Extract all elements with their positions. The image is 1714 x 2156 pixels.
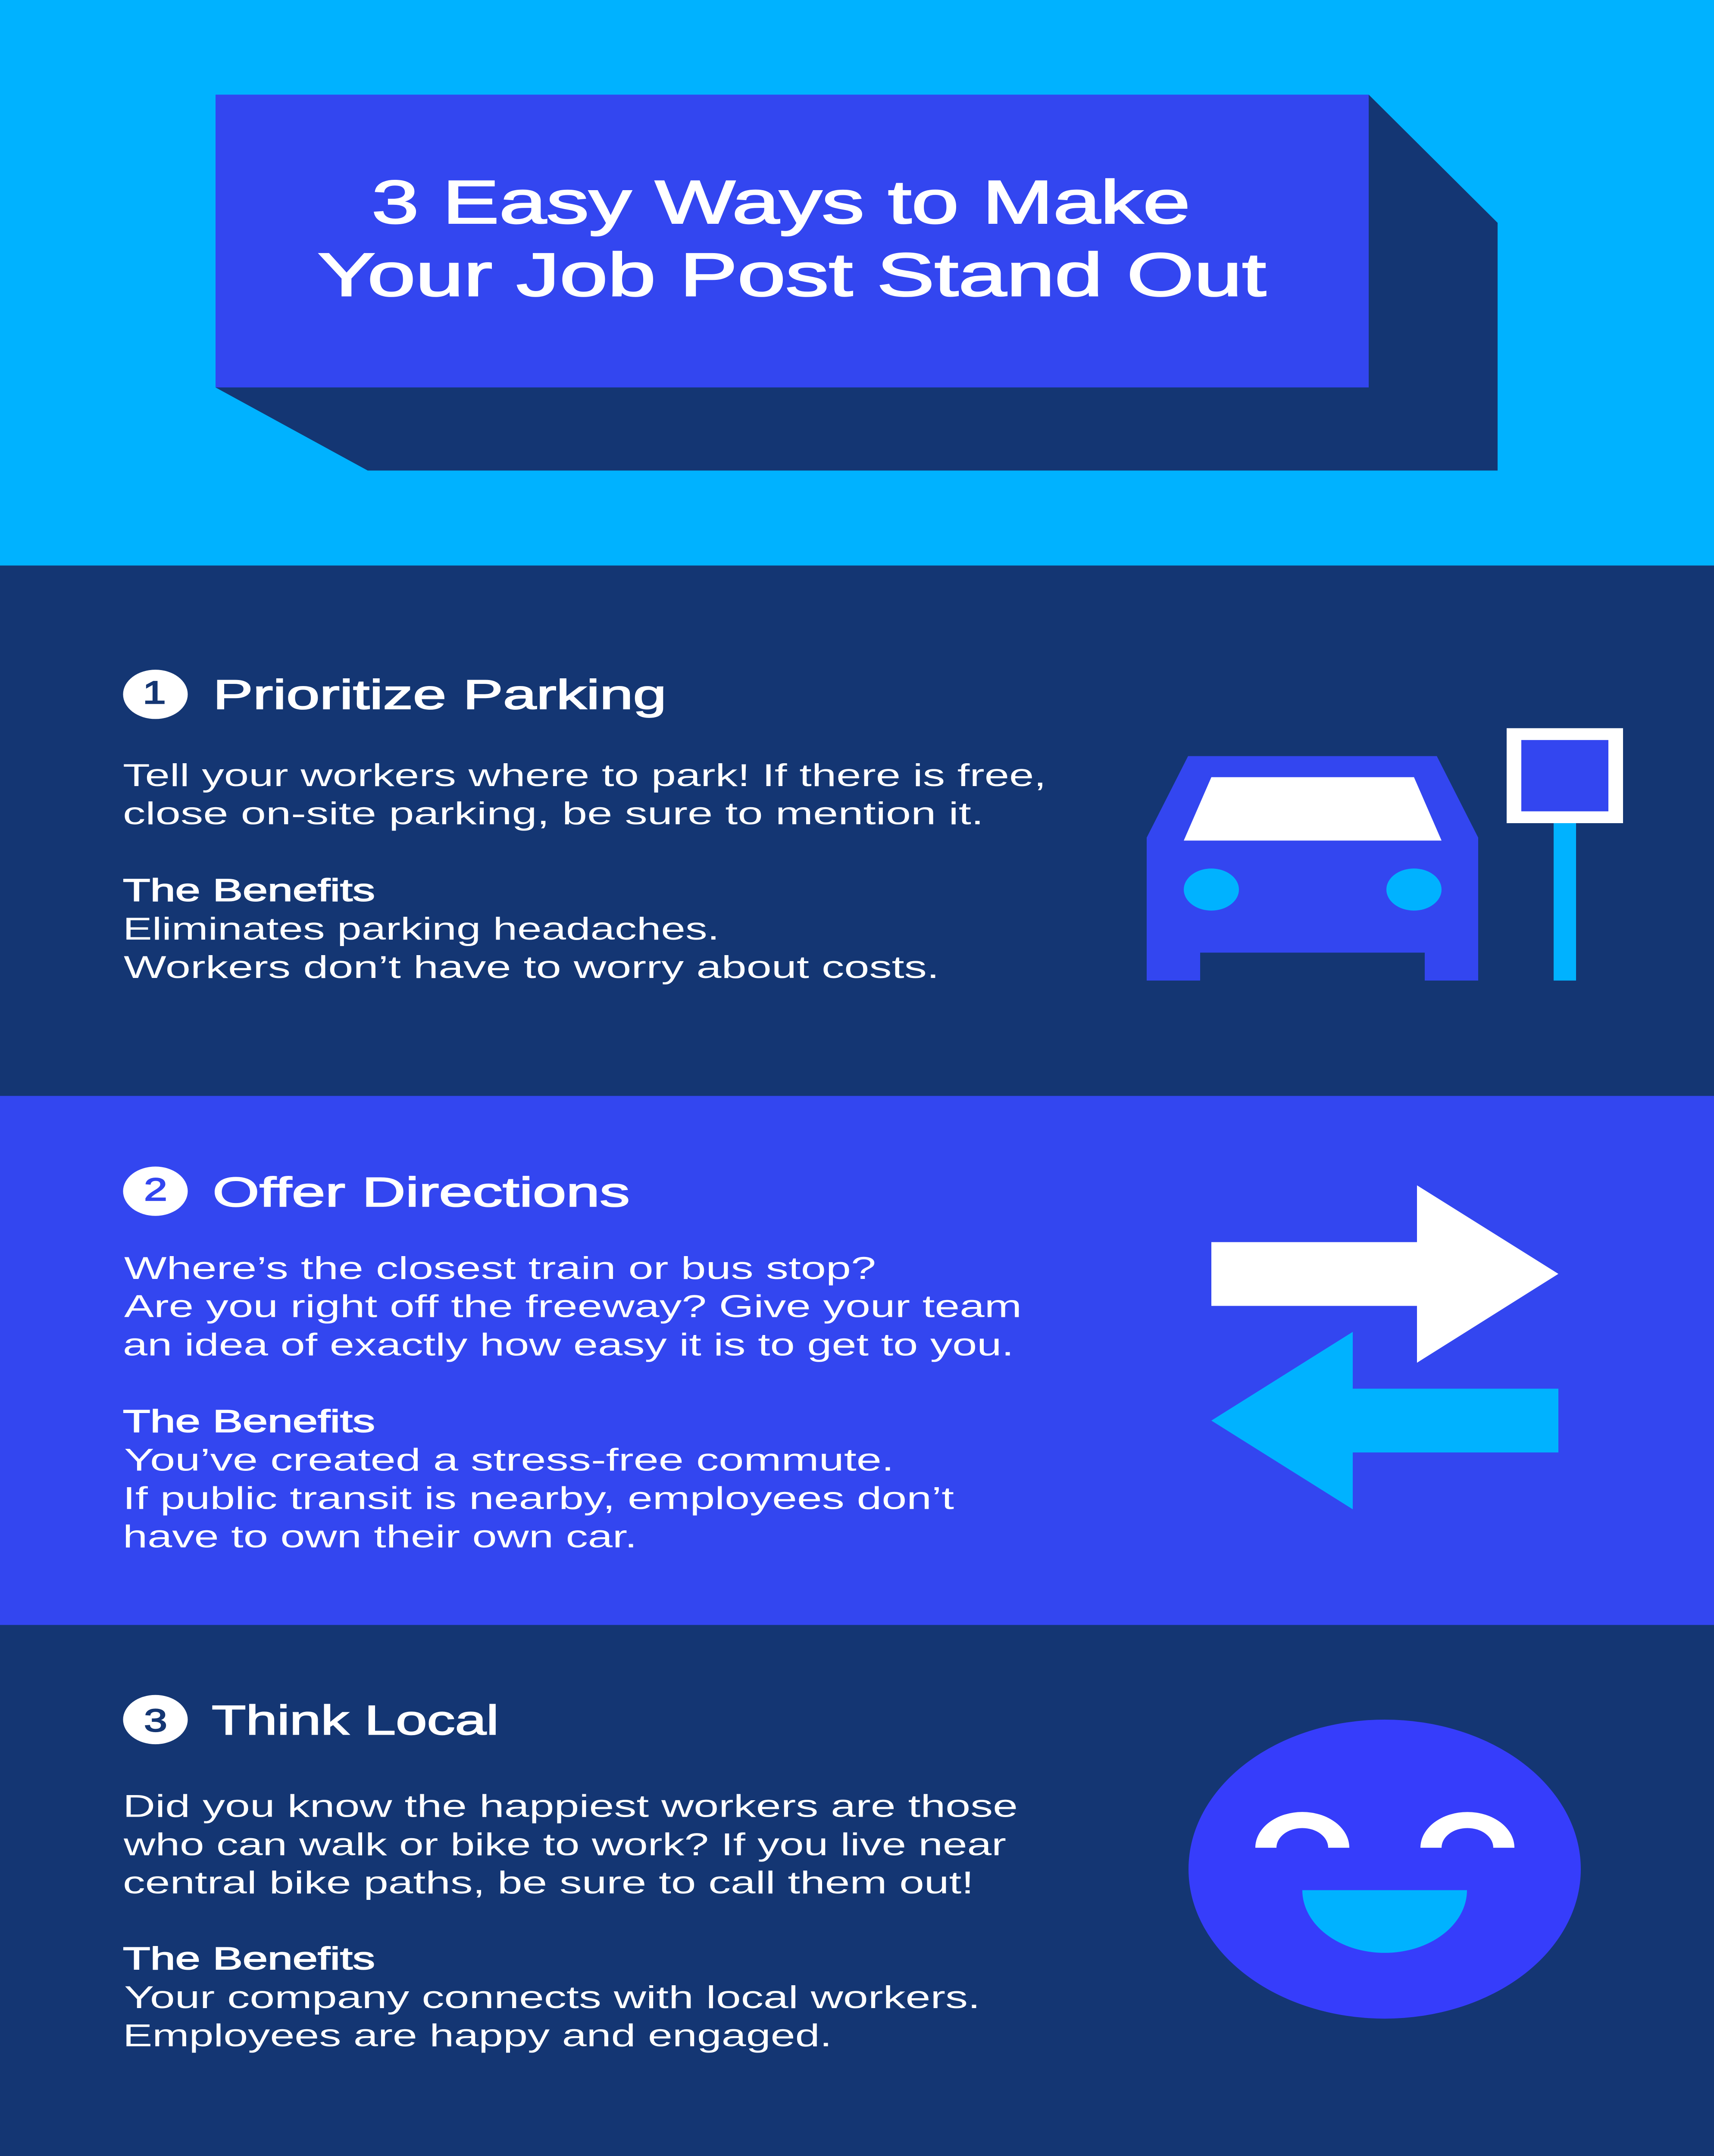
number badge 2 [123,1166,188,1216]
number badge 1: 1 [143,675,166,711]
title card shadow [216,94,1498,470]
body text: parking [123,758,1046,831]
benefits: directions: The Benefits [123,1404,375,1439]
heading: think local: Think Local [212,1697,499,1743]
body text: parking: Tell your workers where to park! If there is free, [123,758,1046,793]
body text: local: Did you know the happiest workers are those [123,1789,1018,1824]
title: 3 Easy Ways to Make [372,168,1190,236]
title card [216,94,1369,387]
benefits: local [123,1941,980,2053]
body text: local: central bike paths, be sure to call them out! [123,1865,974,1900]
benefits: directions: have to own their own car. [123,1519,637,1554]
panel: offer directions [0,1096,1714,1625]
body text: parking: close on-site parking, be sure to mention it. [123,796,984,831]
heading: prioritize parking: Prioritize Parking [213,671,666,718]
panel: think local [0,1625,1714,2156]
panel: header [0,0,1714,566]
benefits: directions [123,1404,954,1554]
number badge 3 [123,1695,188,1744]
icon: parking sign [1507,728,1623,981]
benefits: parking: Eliminates parking headaches. [123,912,719,946]
benefits: local: The Benefits [123,1941,375,1976]
body text: directions [123,1251,1022,1363]
benefits: directions: If public transit is nearby, employees don’t [123,1481,954,1516]
icon: white arrow right [1211,1185,1558,1363]
icon: smiley face [1189,1720,1581,2018]
panel: prioritize parking [0,566,1714,1096]
benefits: parking: The Benefits [123,873,375,908]
body text: directions: an idea of exactly how easy it is to get to you. [123,1327,1014,1363]
number badge 1 [123,670,188,719]
number badge 3: 3 [144,1703,167,1739]
benefits: parking: Workers don’t have to worry about costs. [124,950,939,985]
icon: car [1147,756,1478,981]
benefits: directions: You’ve created a stress-free commute. [124,1442,894,1478]
title [318,168,1266,309]
body text: directions: Where’s the closest train or bus stop? [124,1251,876,1286]
title: Your Job Post Stand Out [318,241,1266,309]
benefits: local: Employees are happy and engaged. [123,2018,832,2053]
benefits: local: Your company connects with local workers. [124,1980,980,2015]
heading: offer directions: Offer Directions [213,1169,630,1215]
benefits: parking [123,873,939,985]
number badge 2: 2 [144,1172,167,1207]
body text: local: who can walk or bike to work? If you live near [123,1827,1006,1862]
body text: local [123,1789,1018,1900]
icon: cyan arrow left [1211,1332,1558,1509]
body text: directions: Are you right off the freeway? Give your team [124,1289,1022,1324]
